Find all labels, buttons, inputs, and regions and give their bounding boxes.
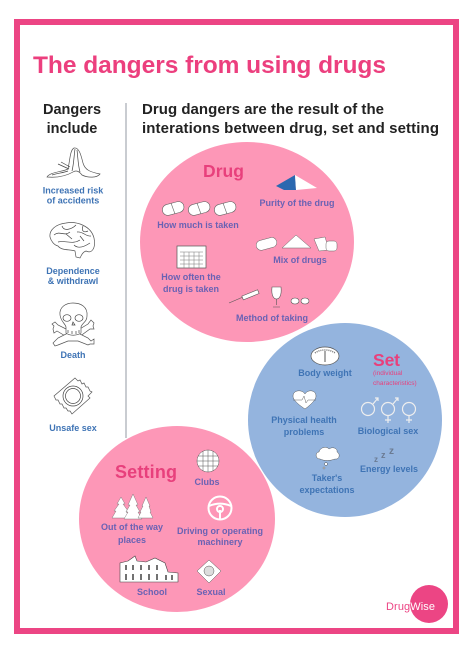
- icon: trees: [112, 494, 153, 519]
- icon: pills: [161, 200, 237, 217]
- heading: dangers include: Dangers: [43, 102, 101, 118]
- text: individual characteristics: characteristics): [373, 380, 417, 387]
- text: school: School: [137, 587, 167, 597]
- text: unsafe sex: Unsafe sex: [49, 423, 97, 433]
- text: dependence and withdrawl: & withdrawl: [48, 276, 98, 286]
- heading: drug dangers: Drug dangers are the result of the: [142, 101, 384, 118]
- icon: condom packet: [54, 378, 92, 414]
- text: sexual: Sexual: [196, 587, 226, 597]
- icon: pills and powder mix: [255, 235, 337, 251]
- text: increased risk of accidents: Increased risk: [43, 186, 103, 196]
- setting background: [79, 426, 275, 612]
- logo circle: [410, 585, 448, 623]
- heading: set: Set: [373, 350, 400, 370]
- text: purity of the drug: Purity of the drug: [260, 198, 334, 208]
- text: method of taking: Method of taking: [236, 313, 308, 323]
- icon: sleep zzz: z: [389, 446, 394, 457]
- text: body weight: Body weight: [298, 368, 352, 378]
- panel: drug circle: [140, 142, 354, 342]
- icon: powder pile purity: [276, 175, 317, 190]
- text: how often the drug is taken: How often the: [161, 272, 221, 282]
- text: death: Death: [60, 350, 86, 360]
- text: driving or operating machinery: Driving or operating: [177, 526, 263, 536]
- text: how often the drug is taken: drug is taken: [163, 284, 219, 294]
- icon: sleep zzz: z: [374, 455, 378, 464]
- text: dependence and withdrawl: Dependence: [46, 266, 100, 276]
- text: physical health problems: Physical health: [271, 415, 337, 425]
- text: mix of drugs: Mix of drugs: [273, 255, 327, 265]
- icon: heart: [293, 391, 316, 409]
- icon: syringe, wine glass, pills: [229, 287, 309, 307]
- drug background: [140, 142, 354, 342]
- text: how much is taken: How much is taken: [157, 220, 239, 230]
- logo text: DrugWise: [386, 601, 435, 613]
- text: out of the way places: places: [118, 535, 146, 545]
- icon: steering wheel: [208, 496, 232, 520]
- icon: disco ball: [197, 450, 219, 472]
- icon: sleep zzz: z: [381, 450, 386, 460]
- panel: set circle: [248, 323, 442, 517]
- text: increased risk of accidents: of accidents: [47, 196, 99, 206]
- heading: second line: interations between drug, set and setting: [142, 120, 439, 137]
- icon: condom packet: [197, 560, 221, 583]
- icon: brain: [50, 223, 95, 258]
- icon: calendar: [177, 246, 206, 268]
- title: The dangers from using drugs: [33, 52, 386, 79]
- panel: dangers include: [43, 102, 104, 433]
- text: taker's expectations: Taker's: [312, 473, 342, 483]
- icon: gender symbols: [362, 398, 416, 423]
- text: driving or operating machinery: machinery: [197, 537, 243, 547]
- panel: setting circle: [79, 426, 275, 612]
- heading: drug: Drug: [203, 161, 244, 181]
- icon: school building: [120, 556, 178, 582]
- icon: scale: [311, 347, 339, 365]
- text: energy levels: Energy levels: [360, 464, 418, 474]
- logo: DrugWise: [386, 585, 448, 623]
- icon: thought cloud: [316, 447, 339, 469]
- divider: [125, 103, 127, 438]
- heading: dangers include: include: [47, 121, 97, 137]
- text: physical health problems: problems: [284, 427, 324, 437]
- text: out of the way places: Out of the way: [101, 522, 163, 532]
- icon: banana skin: [47, 148, 100, 177]
- icon: skull and crossbones: [52, 303, 94, 346]
- text: taker's expectations: expectations: [299, 485, 355, 495]
- text: clubs: Clubs: [194, 477, 220, 487]
- heading: setting: Setting: [115, 462, 177, 482]
- icon: sleep zzz: [374, 446, 394, 464]
- text: individual characteristics: (individual: [373, 370, 402, 377]
- text: biological sex: Biological sex: [358, 426, 418, 436]
- set background: [248, 323, 442, 517]
